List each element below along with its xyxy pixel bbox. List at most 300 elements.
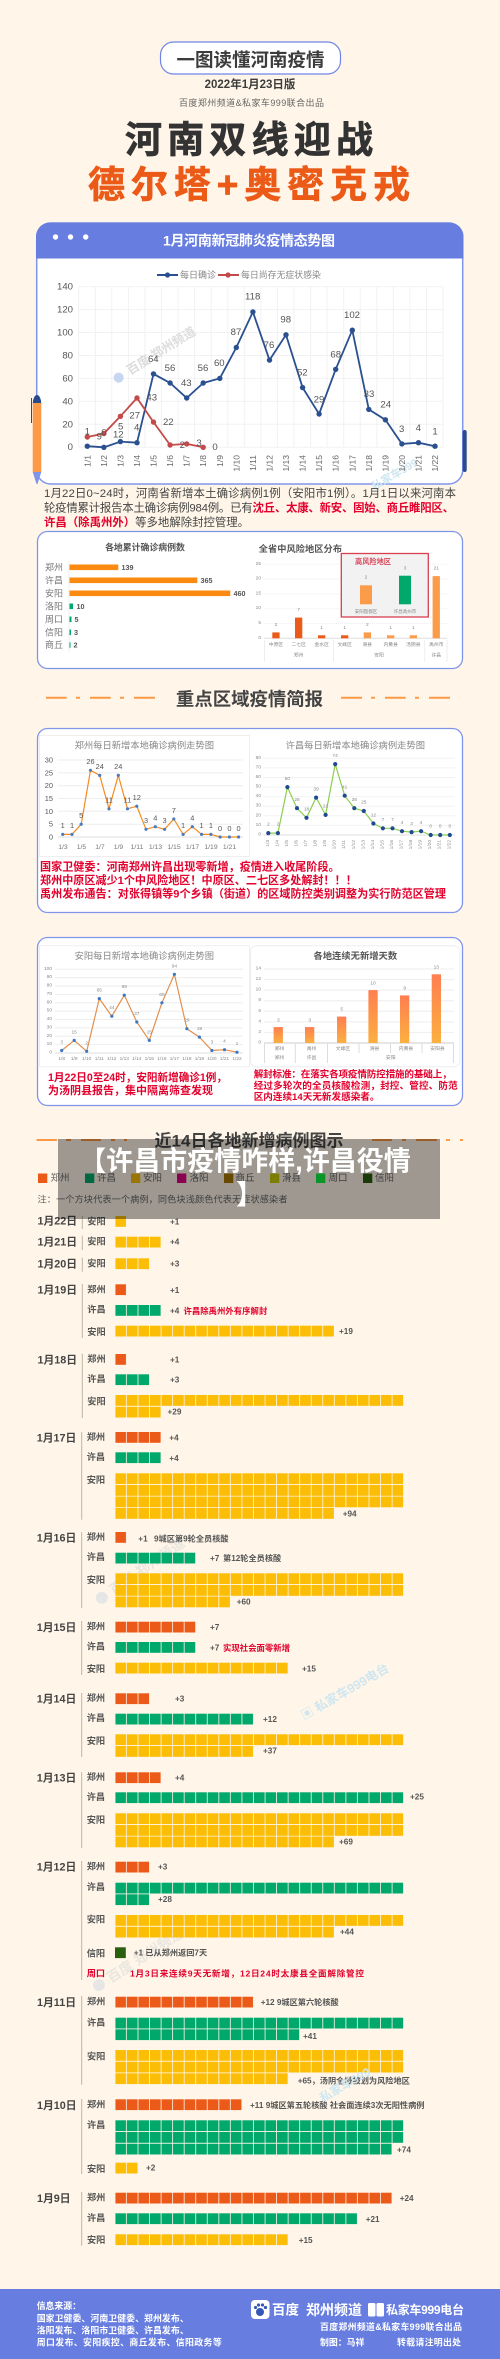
line chart: zhengzhou: 4 (190, 814, 194, 822)
line chart: anyang: 1/15 (145, 1056, 154, 1062)
day: Jan 12: 许昌 (87, 1881, 105, 1892)
line chart: zhengzhou: 1/21 (223, 844, 236, 851)
line chart: zhengzhou: 11 (105, 796, 113, 805)
line chart: anyang: 20 (47, 1033, 52, 1039)
day: Jan 10 (37, 2098, 424, 2174)
line chart: xuchang: 1/21 (437, 840, 443, 849)
day: Jan 16: 第12轮全员核酸 (223, 1553, 282, 1563)
bar chart: cumulative cases: 460 (234, 589, 246, 598)
data labels: 4 (416, 423, 422, 434)
line chart: xuchang: 1/8 (313, 840, 319, 847)
day: Jan 17: +4 (169, 1454, 179, 1463)
day: Jan 11: 安阳 (87, 2050, 105, 2062)
line chart: zhengzhou: 25 (45, 768, 53, 777)
line chart: anyang: 0 (49, 1050, 52, 1056)
text: daily summary: 轮疫情累计报告本土确诊病例984例。已有沈丘、太康、新安、固始、商丘睢阳区、 (44, 501, 454, 515)
legend: regions (38, 1172, 394, 1184)
bar chart: days without new cases: 14 (256, 966, 261, 972)
line chart: anyang: 1/20 (207, 1056, 217, 1062)
edition date: 2022年1月23日版 (205, 77, 296, 91)
red notice: unsealing standard: 经过多轮次的全员核酸检测，封控、管控、防范 (254, 1080, 458, 1092)
day: Jan 14: +12 (263, 1715, 277, 1724)
line chart: xuchang: 2 (277, 822, 280, 828)
line chart: zhengzhou: 1 (200, 821, 204, 830)
legend: regions: 滑县 (282, 1173, 301, 1184)
red notice: national health commission: 郑州中原区减少1个中风险地区！中原区、二七区多处解封！！！ (40, 873, 357, 887)
day: Jan 10: +11 9城区第五轮核酸 社会面连续3次无阳性病例 (250, 2100, 424, 2110)
line chart: anyang: 3 (60, 1040, 63, 1046)
bar chart: days without new cases: 4 (258, 1018, 261, 1024)
line chart: zhengzhou: 3 (163, 816, 167, 825)
line chart: zhengzhou: 7 (172, 806, 176, 815)
bar chart: days without new cases: 内黄县 (399, 1045, 413, 1052)
line chart: anyang: 37 (134, 1011, 140, 1017)
line chart: zhengzhou: 15 (45, 794, 53, 803)
bar chart: cumulative cases: 信阳 (45, 626, 63, 637)
line chart: anyang: 1/22 (232, 1056, 242, 1062)
line chart: anyang: 90 (47, 974, 52, 980)
bar chart: medium risk areas: 文峰区 (337, 641, 352, 648)
data labels: 118 (245, 292, 260, 302)
line chart: xuchang: 7 (391, 817, 394, 823)
line chart: zhengzhou: 1/11 (131, 844, 144, 851)
day: Jan 16 (37, 1531, 403, 1608)
line chart: xuchang: 18 (304, 806, 309, 812)
line chart: xuchang: 1/12 (351, 840, 357, 849)
callout: high risk areas: 许昌禹州市 (394, 608, 417, 615)
data labels: 56 (198, 363, 208, 374)
bar chart: cumulative cases (45, 542, 246, 652)
bar chart: days without new cases: 0 (258, 1040, 261, 1046)
line chart: xuchang: 1/14 (370, 840, 376, 849)
data labels: 52 (297, 368, 308, 378)
x axis labels: 1/5 (148, 455, 158, 467)
line chart: xuchang: 60 (256, 774, 261, 780)
day: Jan 12: 1月3日来连续9天无新增，12日24时太康县全面解除管控 (130, 1968, 364, 1979)
line chart: xuchang: 1/9 (322, 840, 328, 847)
line chart: xuchang: 1/4 (274, 840, 280, 847)
x axis labels: 1/3 (115, 455, 125, 467)
line chart: anyang: 4 (223, 1039, 226, 1045)
day: Jan 14 (37, 1692, 403, 1757)
line chart: xuchang: 1/13 (360, 840, 366, 849)
y axis labels: 100 (57, 328, 73, 338)
bar chart: days without new cases: 禹州 (307, 1045, 316, 1052)
overlay banner (58, 1139, 440, 1219)
data labels: 33 (364, 389, 374, 400)
x axis labels: 1/21 (414, 455, 424, 472)
x axis labels: 1/12 (264, 455, 274, 472)
bar chart: cumulative cases: 139 (122, 563, 134, 572)
line chart: anyang: 60 (159, 992, 165, 998)
data labels: 24 (380, 400, 392, 410)
line chart: anyang: 1/10 (82, 1056, 92, 1062)
day: Jan 17: 1月17日 (37, 1432, 76, 1444)
overlay text: 】 (236, 1180, 263, 1210)
line chart: zhengzhou: 24 (96, 762, 104, 771)
data labels: 43 (181, 378, 192, 389)
bar chart: cumulative cases: 365 (200, 576, 212, 585)
bar chart: days without new cases: 滑县 (370, 1045, 379, 1052)
data labels: 60 (214, 358, 225, 369)
line chart: anyang: 30 (47, 1024, 52, 1030)
day: Jan 10: 安阳 (87, 2163, 105, 2174)
red notice: national health commission: 国家卫健委：河南郑州许昌出现零新增，疫情进入收尾阶段。 (40, 860, 340, 874)
x axis labels: 1/19 (380, 455, 390, 472)
data labels: 22 (163, 417, 174, 428)
day: Jan 11: +41 (303, 2032, 317, 2041)
day: Jan 16: 9城区第9轮全员核酸 (154, 1534, 229, 1544)
red notice: national health commission: 禹州发布通告：对张得镇等9个乡镇（街道）的区域防控类别调整为实行防范区管理 (40, 886, 446, 900)
day: Jan 18: +29 (168, 1408, 182, 1416)
y axis labels: 140 (57, 282, 73, 292)
panel: anyang and quarantine-free days (38, 938, 462, 1106)
data labels: 5 (118, 422, 123, 432)
day: Jan 17: 许昌 (87, 1451, 105, 1462)
day: Jan 14: +37 (263, 1746, 277, 1756)
bar chart: cumulative cases: 安阳 (45, 587, 63, 598)
x axis labels (82, 455, 440, 472)
day: Jan 15: 许昌 (87, 1640, 105, 1652)
footer: sources: 周口发布、安阳疾控、商丘发布、信阳政务等 (37, 2337, 222, 2348)
footer: sources: 信息来源： (37, 2300, 81, 2311)
line chart: anyang: 2 (85, 1040, 88, 1046)
day: Jan 13: 安阳 (87, 1814, 105, 1825)
x axis labels: 1/1 (82, 455, 92, 467)
bar chart: days without new cases: 3 (277, 1018, 280, 1024)
line chart: zhengzhou: 5 (49, 820, 53, 829)
line chart: zhengzhou: 1/5 (77, 844, 86, 851)
day: Jan 13: +4 (175, 1774, 185, 1782)
line chart: anyang: 1/19 (195, 1056, 204, 1062)
line chart: xuchang: 41 (342, 784, 348, 790)
footer reprint note: 转载请注明出处 (397, 2336, 461, 2348)
watermark: radio mid: ▣ 私家车999电台 (298, 1660, 392, 1723)
line chart: xuchang: 1/19 (418, 840, 424, 849)
line chart: zhengzhou: 20 (45, 781, 53, 790)
line chart: xuchang (256, 739, 455, 849)
line chart: xuchang: 1/10 (332, 840, 338, 849)
bar chart: medium risk areas: 内黄县 (383, 641, 398, 648)
day: Jan 9 (37, 2192, 414, 2246)
line chart: xuchang: 0 (429, 824, 432, 830)
line: daily confirmed (85, 309, 438, 450)
day: Jan 13: 1月13日 (37, 1772, 76, 1784)
day: Jan 21: 1月21日 (38, 1236, 77, 1248)
bar chart: days without new cases: 10 (370, 980, 376, 986)
line chart: anyang: 50 (47, 1008, 52, 1014)
day: Jan 12: 安阳 (87, 1914, 105, 1924)
data labels: 98 (280, 314, 291, 326)
line chart: anyang: 10 (47, 1041, 52, 1047)
day: Jan 18: 1月18日 (38, 1353, 77, 1366)
main headline: 河南双线迎战 (125, 120, 373, 160)
line chart: zhengzhou: 1/7 (95, 844, 105, 851)
logo text: baidu zhengzhou: 百度 (272, 2302, 299, 2318)
day: Jan 12: 信阳 (87, 1948, 105, 1958)
line chart: zhengzhou: 4 (153, 814, 157, 822)
x axis labels: 1/13 (281, 455, 291, 472)
day: Jan 19: +4 (170, 1306, 180, 1316)
day: Jan 18: 郑州 (87, 1353, 106, 1364)
line chart: xuchang: 50 (256, 784, 261, 790)
bar chart: medium risk areas: 许昌 (431, 652, 441, 658)
bar chart: days without new cases: 安阳 (386, 1054, 396, 1061)
legend: 每日尚存无症状感染 (241, 269, 321, 280)
day: Jan 20: 安阳 (87, 1258, 106, 1268)
line chart: xuchang: 1/17 (398, 840, 404, 849)
day: Jan 20: +3 (170, 1260, 180, 1268)
bar chart: medium risk areas: 1 (389, 625, 392, 631)
line chart: anyang: 1/21 (220, 1056, 229, 1062)
icon: pencil left (31, 395, 41, 484)
day: Jan 15: +7 (210, 1644, 220, 1652)
day: Jan 17 (37, 1431, 403, 1520)
red notice: anyang: 为汤阴县报告，集中隔离筛查发现 (48, 1083, 213, 1097)
line chart: zhengzhou: 1/9 (114, 844, 123, 851)
data labels: 12 (113, 430, 124, 440)
window dots (53, 234, 88, 240)
day: Jan 15: +7 (210, 1623, 220, 1632)
bar chart: medium risk areas: 汤阴县 (406, 641, 421, 648)
bar chart: cumulative cases: 许昌 (45, 574, 63, 585)
line chart: zhengzhou: 1/17 (186, 844, 199, 851)
line chart: anyang: 29 (184, 1018, 190, 1024)
line chart: anyang: 1/8 (58, 1056, 65, 1062)
day: Jan 9: +24 (400, 2194, 414, 2203)
day: Jan 17: +94 (343, 1510, 357, 1518)
day: Jan 20: 1月20日 (38, 1258, 77, 1270)
line chart: zhengzhou: 0 (49, 832, 53, 842)
line chart: anyang: 1/16 (157, 1056, 167, 1062)
day: Jan 15: +15 (302, 1664, 316, 1674)
icon: baidu paw (251, 2300, 270, 2319)
line chart: zhengzhou: 26 (86, 757, 95, 766)
day: Jan 15: 1月15日 (37, 1621, 76, 1634)
line chart: anyang: 1/12 (107, 1056, 117, 1062)
heading: 14 day cases: 近14日各地新增病例图示 (155, 1130, 343, 1150)
day: Jan 22: +1 (170, 1218, 180, 1226)
callout: high risk areas: 安阳殷都区 (355, 608, 378, 615)
day: Jan 16: +60 (237, 1598, 251, 1606)
data labels: 102 (344, 310, 360, 321)
line chart: xuchang: 80 (256, 755, 261, 761)
bar chart: days without new cases: 2 (258, 1029, 261, 1035)
line chart: xuchang: 21 (323, 804, 329, 810)
data labels: 0 (101, 428, 107, 438)
y axis labels: 60 (62, 374, 73, 384)
bar chart: days without new cases: 9 (403, 986, 406, 992)
day: Jan 12: 郑州 (87, 1860, 105, 1872)
day: Jan 11: 1月11日 (37, 1996, 76, 2009)
bar chart: medium risk areas: 10 (256, 605, 261, 611)
bar chart: medium risk areas: 5 (258, 620, 261, 626)
bar chart: days without new cases (250, 946, 460, 1067)
legend: 每日确诊 (180, 269, 216, 280)
line chart: anyang: 1 (236, 1041, 239, 1047)
day: Jan 16: 郑州 (87, 1531, 105, 1542)
callout: high risk areas: 高风险地区 (355, 557, 391, 566)
orange headline: 德尔塔+奥密克戎 (88, 164, 410, 206)
line chart: zhengzhou: 郑州每日新增本地确诊病例走势图 (75, 739, 214, 750)
line chart: xuchang: 1/11 (341, 840, 347, 849)
x axis labels: 1/15 (314, 455, 324, 472)
day: Jan 18: +3 (170, 1376, 180, 1384)
line chart: anyang: 65 (97, 988, 102, 994)
bar chart: cumulative cases: 10 (76, 602, 84, 611)
bar chart: cumulative cases: 3 (74, 628, 78, 637)
title pill (160, 42, 340, 74)
day: Jan 22 (38, 1214, 180, 1229)
line chart: xuchang: 2 (267, 822, 270, 828)
day: Jan 21 (38, 1236, 180, 1250)
data labels: 56 (165, 363, 175, 374)
day: Jan 12: 周口 (87, 1969, 105, 1979)
day: Jan 21: +4 (170, 1238, 180, 1246)
day: Jan 16: +1 (138, 1534, 148, 1544)
data labels: 76 (264, 340, 274, 351)
line chart: zhengzhou (40, 736, 250, 856)
bar chart: medium risk areas: 15 (256, 590, 261, 596)
x axis labels: 1/4 (132, 455, 142, 467)
bar chart: medium risk areas: 1 (320, 625, 323, 631)
bar chart: cumulative cases: 洛阳 (45, 600, 63, 611)
day: Jan 10: 许昌 (87, 2119, 105, 2130)
bar chart: days without new cases: 各地连续无新增天数 (313, 950, 398, 961)
footer: sources (37, 2300, 222, 2348)
line chart: xuchang: 0 (448, 824, 451, 830)
watermark: radio lower: 私家车999 (317, 2064, 373, 2105)
day: Jan 18: +1 (170, 1356, 180, 1364)
line chart: anyang: 44 (109, 1005, 115, 1011)
day: Jan 9: 郑州 (87, 2192, 105, 2202)
callout: high risk areas: 3 (404, 566, 407, 572)
line chart: anyang: 80 (47, 982, 52, 988)
day: Jan 9: 1月9日 (37, 2192, 71, 2205)
watermark: radio: 私家车999 (369, 455, 420, 493)
x axis labels: 1/7 (182, 455, 192, 467)
panel: zhengzhou and xuchang (38, 728, 462, 912)
footer credit: 百度郑州频道&私家车999联合出品 (320, 2321, 462, 2332)
line chart: xuchang: 1/22 (446, 840, 452, 849)
data labels: 87 (231, 327, 241, 338)
day: Jan 19: 安阳 (87, 1326, 106, 1337)
day: Jan 11: 郑州 (87, 1996, 105, 2006)
day: Jan 19: 许昌除禹州外有序解封 (184, 1306, 268, 1316)
data labels: 3 (399, 424, 404, 435)
line chart: xuchang: 30 (256, 803, 261, 809)
day: Jan 12: +44 (340, 1928, 354, 1936)
bar chart: days without new cases: 10 (256, 987, 261, 993)
icon: radio logo (368, 2303, 384, 2316)
line chart: xuchang: 12 (371, 812, 376, 818)
day: Jan 15: 实现社会面零新增 (223, 1643, 290, 1653)
line chart: xuchang: 40 (256, 793, 261, 799)
day: Jan 16: 1月16日 (37, 1532, 76, 1544)
legend: regions: 商丘 (236, 1172, 255, 1184)
bar chart: medium risk areas: 中原区 (269, 641, 283, 648)
data labels: 2 (180, 440, 185, 451)
watermark: baidu: 百度 郑州频道 (124, 323, 199, 378)
bar chart: medium risk areas: 0 (258, 635, 261, 641)
y axis labels: 120 (57, 304, 73, 316)
day: Jan 18: 许昌 (87, 1373, 106, 1384)
bar chart: medium risk areas: 全省中风险地区分布 (259, 543, 342, 554)
line chart: anyang: 1/11 (95, 1056, 104, 1062)
logo text: radio: 私家车999电台 (386, 2302, 464, 2317)
line chart: zhengzhou: 12 (133, 793, 141, 802)
day: Jan 11: +65，汤阴全域被划为风险地区 (298, 2076, 410, 2086)
bar chart: medium risk areas: 金水区 (314, 641, 329, 648)
bar chart: medium risk areas: 滑县 (362, 641, 372, 648)
data labels: 64 (148, 354, 159, 365)
day: Jan 13: 许昌 (87, 1791, 105, 1802)
line chart: zhengzhou: 1 (70, 821, 74, 830)
day: Jan 19: 许昌 (87, 1304, 106, 1314)
line chart: anyang: 69 (122, 984, 127, 990)
bar chart: days without new cases: 许昌 (307, 1054, 316, 1061)
overlay text (79, 1147, 411, 1210)
callout: high risk areas (341, 554, 428, 617)
callout: high risk areas: 2 (365, 574, 368, 580)
line chart: xuchang: 39 (313, 786, 319, 792)
red notice: unsealing standard (254, 1068, 458, 1103)
day: Jan 12: +28 (158, 1895, 172, 1904)
day: Jan 14: 1月14日 (37, 1692, 76, 1706)
data labels: 1 (85, 426, 90, 438)
header block (88, 42, 410, 206)
red notice: anyang (48, 1071, 227, 1097)
footer: sources: 洛阳发布、洛阳市卫健委、许昌发布、 (37, 2325, 189, 2336)
line chart: anyang: 1/17 (170, 1056, 179, 1062)
y axis labels: 0 (68, 442, 73, 453)
line chart: xuchang: 1/18 (408, 840, 414, 849)
x axis labels: 1/6 (165, 455, 175, 467)
line chart: xuchang: 1/3 (265, 840, 271, 847)
line chart: xuchang: 0 (258, 832, 261, 838)
day: Jan 17: 郑州 (87, 1431, 105, 1442)
day: Jan 20 (38, 1258, 180, 1272)
heading: key regions: 重点区域疫情简报 (176, 688, 323, 710)
day: Jan 12 (37, 1860, 403, 1980)
bar chart: cumulative cases: 商丘 (45, 639, 63, 650)
day: Jan 16: +7 (210, 1554, 220, 1563)
x axis labels: 1/10 (231, 455, 241, 472)
line chart: xuchang: 0 (439, 824, 442, 830)
legend: regions: 周口 (328, 1173, 348, 1184)
line chart: xuchang: 25 (361, 800, 367, 806)
footer author: 制图：马祥 (320, 2336, 364, 2348)
day: Jan 16: 许昌 (87, 1551, 105, 1562)
line chart: zhengzhou: 1 (181, 821, 185, 830)
day: Jan 19 (38, 1283, 353, 1338)
line chart: anyang: 1/14 (132, 1056, 142, 1062)
day: Jan 13: +25 (410, 1792, 424, 1802)
day: Jan 10: +2 (146, 2164, 156, 2172)
bar chart: days without new cases: 6 (258, 1008, 261, 1014)
line chart: anyang: 94 (172, 963, 177, 969)
day: Jan 9: +21 (366, 2215, 380, 2224)
day: Jan 14: +3 (175, 1694, 185, 1704)
data labels: 29 (314, 394, 324, 406)
line chart: zhengzhou: 0 (218, 824, 222, 833)
footer (0, 2289, 500, 2359)
red notice: unsealing standard: 解封标准：在落实各项疫情防控措施的基础上， (254, 1068, 452, 1080)
line chart: zhengzhou: 1/19 (204, 844, 218, 851)
x axis labels: 1/18 (364, 455, 374, 472)
x axis labels: 1/20 (397, 455, 407, 472)
footer: sources: 国家卫健委、河南卫健委、郑州发布、 (37, 2312, 189, 2323)
